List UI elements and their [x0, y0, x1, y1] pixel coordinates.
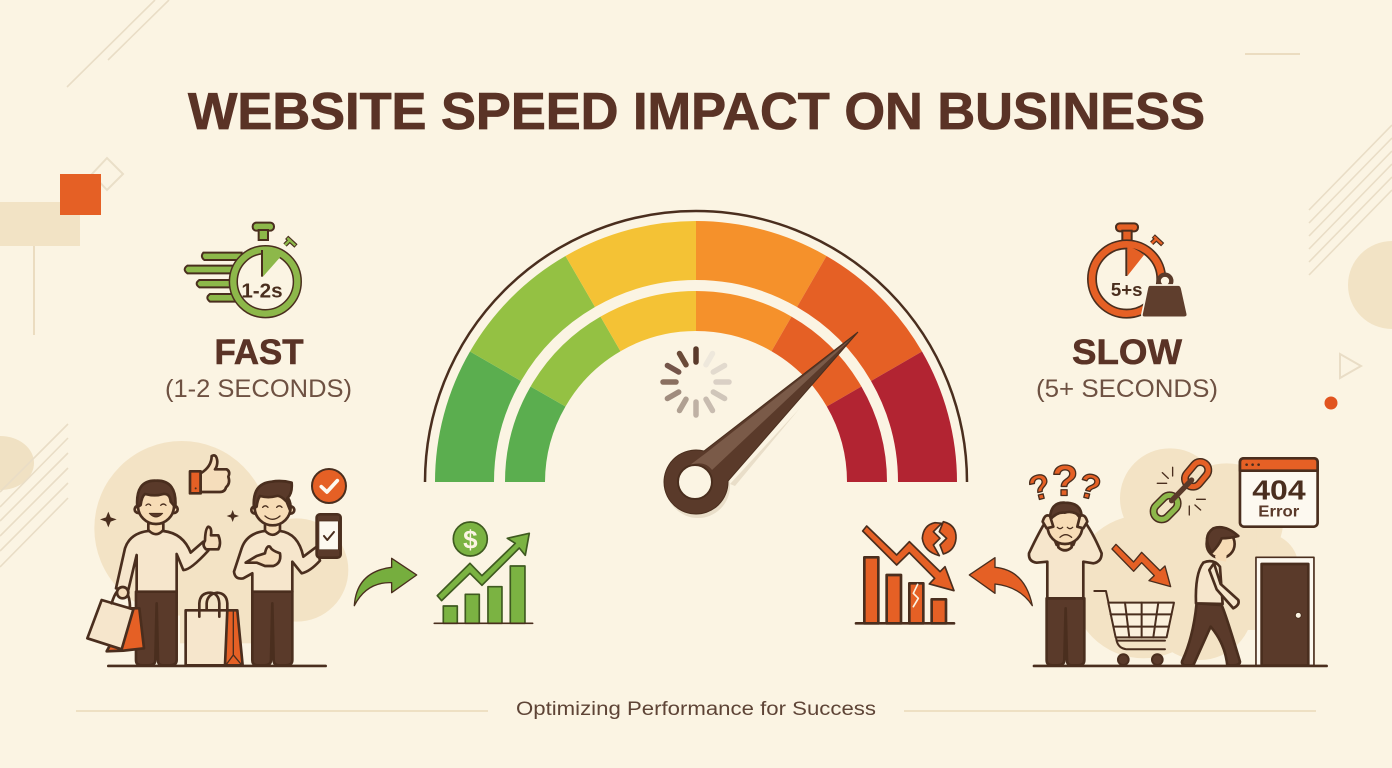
- shopping bag centre: [186, 593, 243, 665]
- ground line: [108, 662, 326, 670]
- icon: growth chart: $: [463, 525, 478, 555]
- inner colour band: [505, 291, 887, 482]
- decorative orange square: [60, 174, 101, 215]
- arrow: green to growth chart: [354, 558, 417, 606]
- icon: slow stopwatch with weight: 5+s: [1111, 279, 1142, 300]
- outer colour band: [435, 221, 957, 482]
- error window: 404: [1252, 474, 1306, 505]
- error window: [1240, 458, 1318, 527]
- icon: fast stopwatch: [185, 223, 297, 314]
- decorative orange dot: [1324, 396, 1338, 410]
- background cloud: [1072, 448, 1298, 660]
- phone: [317, 514, 341, 558]
- fast heading: FAST: [214, 333, 304, 372]
- question marks: ?: [1075, 466, 1104, 508]
- frustrated person: [1029, 503, 1102, 665]
- exit door: [1256, 557, 1314, 666]
- question marks: [1025, 457, 1104, 509]
- person two: [234, 481, 320, 665]
- scene: happy customers: [87, 441, 533, 666]
- ground line: [1034, 662, 1327, 670]
- sparkles: [100, 510, 239, 527]
- gauge outer arc: [425, 211, 967, 482]
- shopping bags left: [87, 587, 144, 651]
- needle: [664, 332, 858, 514]
- slow subheading: (5+ SECONDS): [1036, 375, 1218, 403]
- arrow: orange to declining chart: [969, 558, 1032, 606]
- slow heading: SLOW: [1072, 333, 1182, 372]
- thumbs up icon: [190, 455, 229, 493]
- question marks: ?: [1052, 457, 1078, 505]
- shopping cart: [1094, 591, 1174, 665]
- title: WEBSITE SPEED IMPACT ON BUSINESS: [188, 83, 1205, 141]
- fast subheading: (1-2 SECONDS): [165, 375, 352, 403]
- check badge: [312, 469, 346, 503]
- needle shadow: [666, 408, 800, 518]
- person one: [116, 481, 220, 665]
- loading spinner: [663, 349, 729, 415]
- falling arrow: [1112, 544, 1171, 587]
- icon: fast stopwatch: 1-2s: [241, 279, 283, 302]
- background blob: [94, 441, 348, 643]
- speedometer gauge: [425, 211, 967, 518]
- walking person: [1182, 527, 1240, 665]
- icon: growth chart: [434, 522, 533, 623]
- scene: frustrated customers: [856, 448, 1327, 666]
- footer tagline: Optimizing Performance for Success: [516, 699, 876, 720]
- icon: broken chain link: [1150, 459, 1212, 523]
- icon: declining chart: [856, 522, 956, 623]
- question marks: ?: [1025, 467, 1055, 509]
- icon: slow stopwatch with weight: [1092, 223, 1187, 317]
- error window: Error: [1258, 504, 1299, 521]
